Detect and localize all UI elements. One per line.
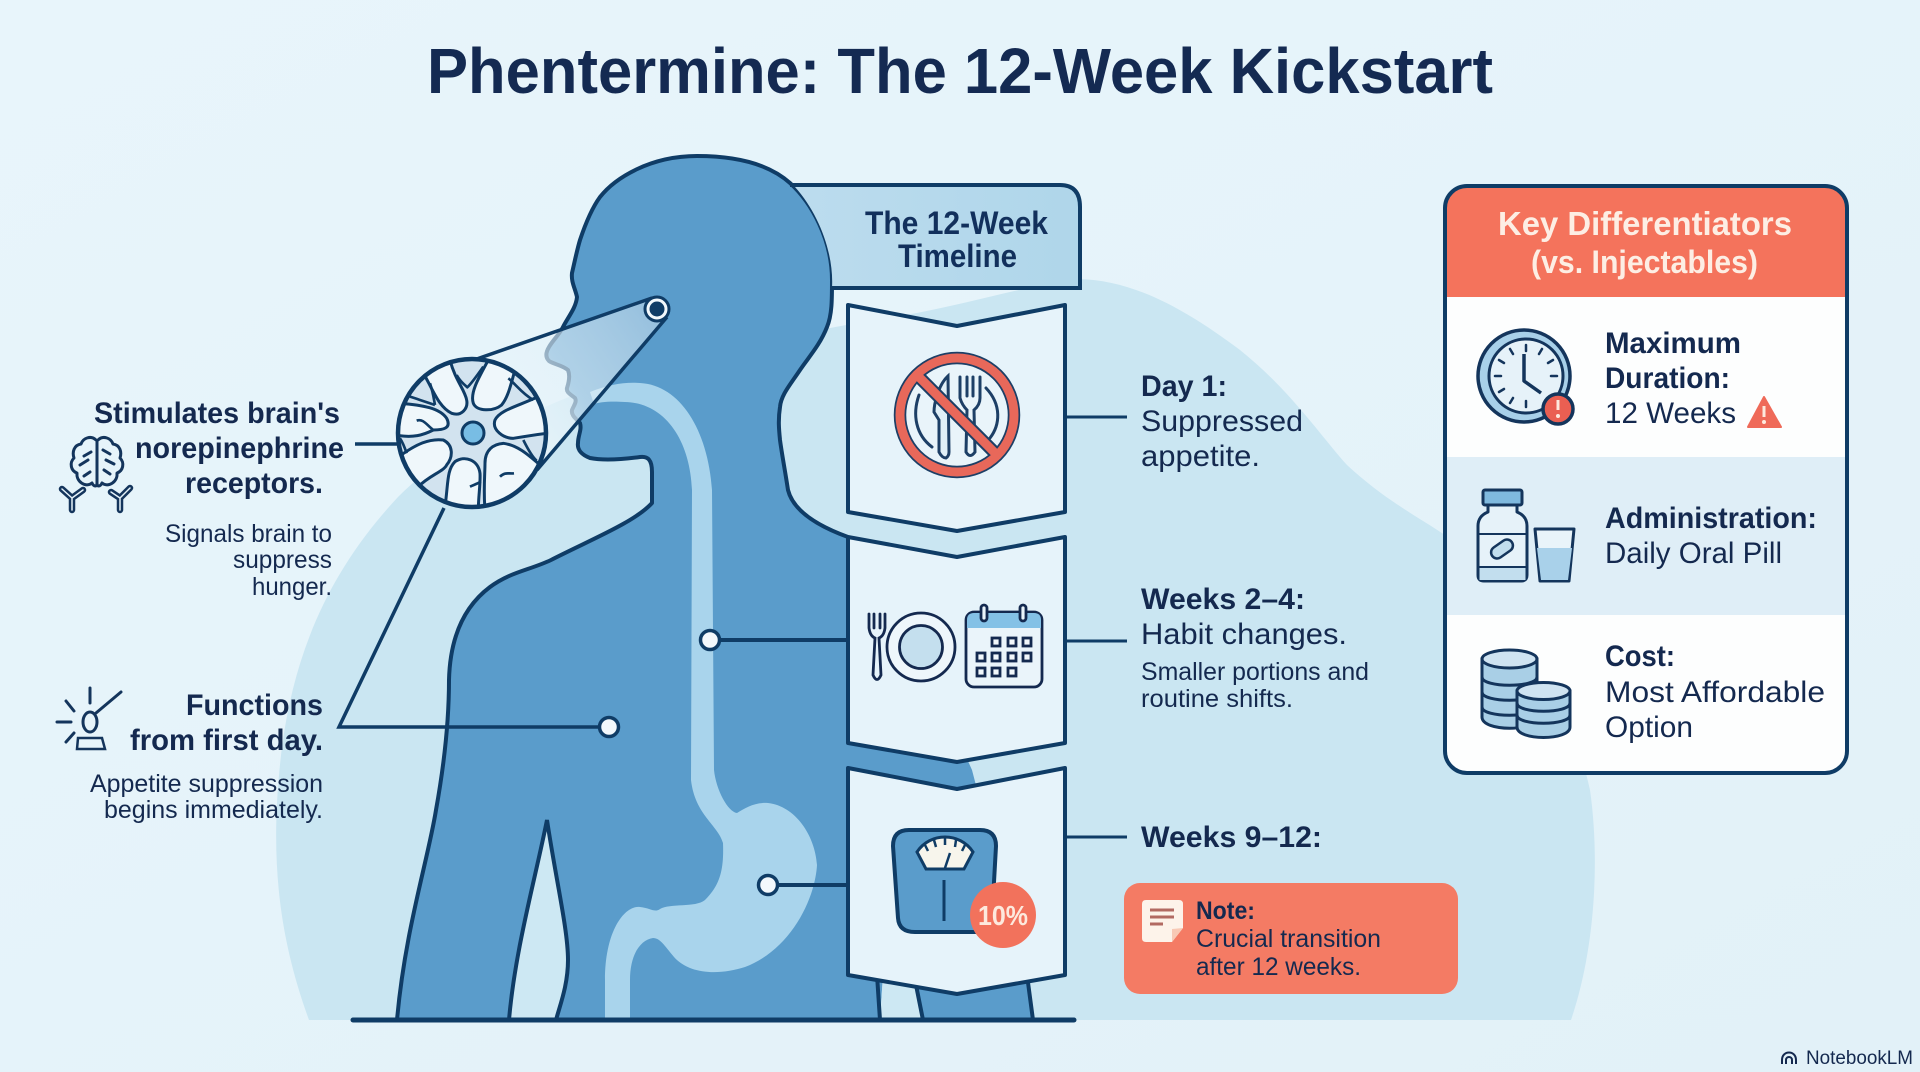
row text: cost: Option [1605, 711, 1693, 744]
heading: stimulates brain: receptors. [185, 467, 323, 500]
timeline header: Timeline [898, 238, 1017, 274]
label: day 1 [1141, 370, 1303, 473]
row text: administration [1605, 502, 1817, 570]
icon: warning triangle [1748, 397, 1781, 427]
callout: note [1124, 883, 1458, 994]
card heading [1498, 205, 1792, 280]
heading: functions from first day [130, 689, 323, 757]
text: appetite suppression [90, 770, 323, 824]
heading: stimulates brain [94, 397, 344, 500]
zoom cone to brain [471, 297, 669, 470]
label: day 1: Day 1: [1141, 370, 1227, 403]
row text: cost [1605, 640, 1825, 744]
row text: maximum duration [1605, 327, 1741, 430]
callout: note: Note: [1196, 897, 1255, 925]
title: Phentermine: The 12-Week Kickstart [427, 35, 1493, 107]
panel: weeks 2-4 [848, 537, 1065, 762]
floor line [353, 1018, 1074, 1022]
icon: no eating [900, 358, 1014, 472]
card heading: Key Differentiators [1498, 205, 1792, 242]
panel: weeks 9-12 [848, 768, 1065, 994]
label: weeks 2-4: Smaller portions and [1141, 658, 1369, 686]
icon: note page [1142, 900, 1183, 942]
label: weeks 2-4 [1141, 583, 1369, 713]
row text: cost: Cost: [1605, 640, 1675, 673]
row text: maximum duration: Maximum [1605, 327, 1741, 360]
row text: maximum duration: Duration: [1605, 362, 1730, 395]
text: appetite suppression: Appetite suppression [90, 770, 323, 798]
badge: 10%: 10% [978, 900, 1028, 931]
row text: maximum duration: 12 Weeks [1605, 397, 1736, 430]
label: weeks 2-4: routine shifts. [1141, 685, 1293, 713]
heading: stimulates brain: Stimulates brain's [94, 397, 340, 430]
label: day 1: appetite. [1141, 440, 1260, 473]
heading: functions from first day: Functions [186, 689, 323, 722]
icon: calendar [966, 605, 1042, 687]
badge: 10% [970, 882, 1036, 948]
icon: fork and plate [869, 613, 955, 681]
text: signals brain: suppress [233, 546, 332, 574]
text: signals brain [165, 520, 332, 601]
timeline header [790, 185, 1080, 288]
callout: note: Crucial transition [1196, 925, 1381, 953]
row text: administration: Daily Oral Pill [1605, 537, 1782, 570]
connectors: panels to labels [1065, 417, 1127, 837]
text: signals brain: Signals brain to [165, 520, 332, 548]
heading: stimulates brain: norepinephrine [135, 432, 344, 465]
connector: stomach/esophagus to panels [700, 630, 848, 894]
callout: note: after 12 weeks. [1196, 953, 1361, 981]
label: day 1: Suppressed [1141, 405, 1303, 438]
leader line to first-day dot [339, 508, 618, 736]
neuron magnifier circle [355, 356, 548, 510]
card heading: (vs. Injectables) [1531, 244, 1758, 280]
esophagus and stomach [590, 383, 817, 1020]
human body silhouette [397, 156, 1033, 1020]
label: weeks 2-4: Weeks 2–4: [1141, 583, 1305, 616]
icon: coin stacks [1482, 650, 1570, 738]
label: weeks 2-4: Habit changes. [1141, 618, 1347, 651]
heading: functions from first day: from first day. [130, 724, 323, 757]
icon: rapid action indicator [57, 688, 121, 749]
background blob [276, 279, 1595, 1020]
text: appetite suppression: begins immediately. [104, 796, 323, 824]
icon: clock with alert [1478, 330, 1573, 424]
label: weeks 9-12: Weeks 9–12: [1141, 821, 1322, 854]
row text: cost: Most Affordable [1605, 676, 1825, 709]
panel: key differentiators [1445, 186, 1847, 773]
timeline header: The 12-Week [865, 205, 1048, 241]
icon: pill bottle and water glass [1478, 490, 1574, 581]
text: signals brain: hunger. [252, 573, 332, 601]
panel: day 1 [848, 305, 1065, 531]
watermark: NotebookLM: NotebookLM [1806, 1048, 1913, 1069]
icon: brain with receptors [62, 437, 130, 510]
row text: administration: Administration: [1605, 502, 1817, 535]
icon: weight scale [893, 830, 996, 932]
